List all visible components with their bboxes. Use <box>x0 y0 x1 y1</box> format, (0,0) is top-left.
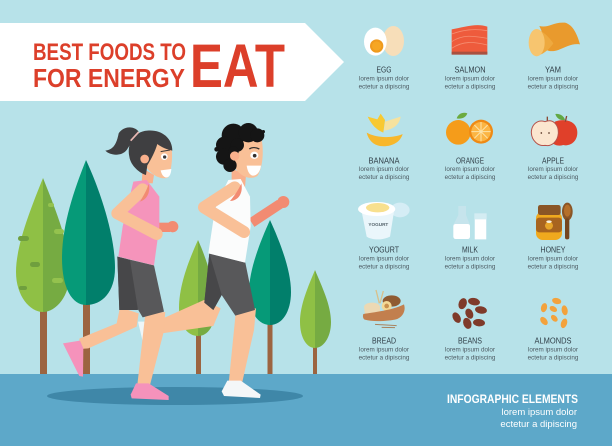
food row 4 <box>359 290 579 362</box>
icon: salmon <box>452 25 487 55</box>
apple: APPLE <box>542 156 564 166</box>
banana <box>359 114 410 181</box>
woman top <box>118 180 159 265</box>
milk: ectetur a dipiscing <box>445 264 496 270</box>
apple: ectetur a dipiscing <box>528 174 579 181</box>
tree 4 <box>249 220 291 374</box>
egg: EGG <box>376 64 392 74</box>
woman runner <box>63 127 178 400</box>
food row 2 <box>359 113 579 181</box>
ponytail <box>105 127 139 155</box>
icon: egg <box>364 26 404 56</box>
beans: BEANS <box>458 336 482 346</box>
yam <box>528 23 580 91</box>
man tank top <box>208 179 251 263</box>
banana: BANANA <box>368 156 400 166</box>
woman back leg <box>79 307 139 349</box>
almonds: lorem ipsum dolor <box>528 346 578 354</box>
food row 1 <box>359 23 580 91</box>
orange: lorem ipsum dolor <box>445 166 495 173</box>
woman front leg <box>137 312 165 385</box>
man back shoe <box>138 322 147 346</box>
egg: ectetur a dipiscing <box>359 84 410 90</box>
tree 1 <box>16 178 70 374</box>
bread <box>359 290 410 362</box>
man neck <box>232 168 246 187</box>
man back arm <box>252 196 289 223</box>
tree 2 <box>62 160 115 374</box>
almonds: ALMONDS <box>534 336 572 346</box>
orange: ectetur a dipiscing <box>445 174 496 181</box>
icon: banana <box>367 114 403 146</box>
bread: ectetur a dipiscing <box>359 354 410 362</box>
trees <box>16 160 331 374</box>
title text: EAT <box>190 32 285 100</box>
bread: BREAD <box>372 336 396 346</box>
milk <box>445 206 496 270</box>
man front leg <box>229 308 256 383</box>
orange: ORANGE <box>456 156 484 166</box>
woman head <box>105 127 172 178</box>
woman back shoe <box>63 341 83 377</box>
yogurt: ectetur a dipiscing <box>359 264 410 270</box>
title text: FOR ENERGY <box>33 65 185 93</box>
man runner <box>138 123 289 398</box>
almonds <box>528 297 579 362</box>
salmon: SALMON <box>454 64 486 74</box>
beans: ectetur a dipiscing <box>445 354 496 362</box>
footer text <box>447 394 578 430</box>
footer text: INFOGRAPHIC ELEMENTS <box>447 394 578 406</box>
title text <box>33 32 285 100</box>
salmon: lorem ipsum dolor <box>445 76 495 82</box>
beans <box>445 297 496 362</box>
salmon <box>445 25 496 91</box>
egg: lorem ipsum dolor <box>359 76 409 82</box>
salmon: ectetur a dipiscing <box>445 84 496 90</box>
yogurt: YOGURT <box>369 244 400 254</box>
title banner <box>0 23 344 101</box>
icon: apple <box>531 114 577 146</box>
icon: orange <box>446 113 493 145</box>
man shorts <box>204 253 255 316</box>
icon: almonds <box>539 297 569 329</box>
icon: milk <box>453 206 487 239</box>
icon: beans <box>451 297 488 330</box>
orange <box>445 113 496 181</box>
icon: honey <box>536 203 573 240</box>
yam: YAM <box>545 64 561 74</box>
honey: ectetur a dipiscing <box>528 264 579 270</box>
beans: lorem ipsum dolor <box>445 346 495 354</box>
egg <box>359 26 410 90</box>
yam: ectetur a dipiscing <box>528 84 579 90</box>
man back leg <box>159 300 221 333</box>
woman shoe <box>131 383 169 400</box>
food row 3 <box>358 202 579 270</box>
title text: BEST FOODS TO <box>33 39 186 66</box>
yam: lorem ipsum dolor <box>528 76 578 82</box>
yogurt: lorem ipsum dolor <box>359 256 409 262</box>
banana: ectetur a dipiscing <box>359 174 410 181</box>
bread: lorem ipsum dolor <box>359 346 409 354</box>
honey: lorem ipsum dolor <box>528 256 578 262</box>
milk: MILK <box>462 244 478 254</box>
ground shadow <box>47 387 303 405</box>
ground <box>0 374 612 446</box>
apple: lorem ipsum dolor <box>528 166 578 173</box>
man shoe <box>222 381 261 398</box>
icon: yam <box>529 23 580 56</box>
tree 5 <box>300 270 331 374</box>
curly hair <box>214 123 265 172</box>
icon: bread <box>363 290 405 328</box>
yogurt <box>358 202 410 270</box>
woman shorts <box>117 257 164 317</box>
honey <box>528 203 579 270</box>
woman neck <box>142 168 154 183</box>
man front arm <box>204 183 244 232</box>
banana: lorem ipsum dolor <box>359 166 409 173</box>
honey: HONEY <box>540 244 566 254</box>
woman front arm <box>117 184 157 234</box>
almonds: ectetur a dipiscing <box>528 354 579 362</box>
footer text: lorem ipsum dolor <box>502 407 577 418</box>
footer text: ectetur a dipiscing <box>500 419 577 430</box>
man head <box>214 123 265 178</box>
milk: lorem ipsum dolor <box>445 256 495 262</box>
woman back arm <box>157 221 178 232</box>
tree 3 <box>179 240 215 374</box>
icon: yogurt cup: YOGURT <box>368 222 388 227</box>
apple <box>528 114 579 181</box>
